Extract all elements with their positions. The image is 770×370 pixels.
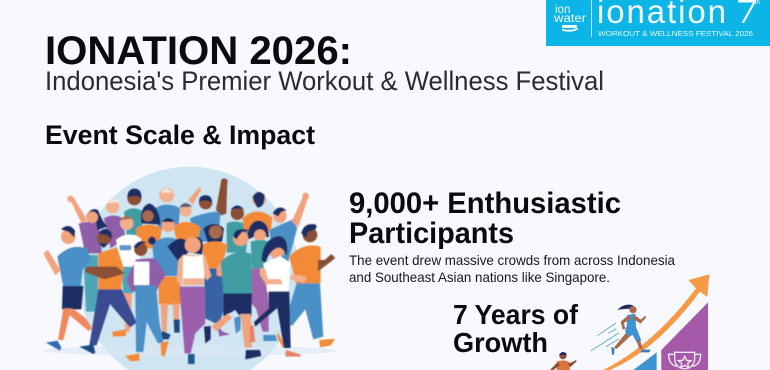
stat description: The event drew massive crowds from across Indonesia — [349, 252, 675, 268]
title: IONATION 2026: — [45, 29, 352, 73]
festival tagline: WORKOUT & WELLNESS FESTIVAL 2026 — [598, 29, 753, 38]
front row people — [43, 226, 307, 364]
running woman — [611, 305, 651, 355]
stat heading: 9,000+ Enthusiastic — [349, 187, 621, 220]
logo banner — [546, 0, 770, 46]
blue bar — [633, 352, 657, 370]
speed lines — [591, 323, 619, 351]
stat heading — [349, 187, 621, 250]
growth illustration — [550, 274, 709, 370]
backdrop circle — [79, 167, 300, 370]
subtitle: Indonesia's Premier Workout & Wellness Festival — [45, 66, 604, 96]
trophy icon — [669, 352, 701, 369]
second runner — [550, 352, 577, 370]
ground shadow — [43, 345, 337, 356]
stat description: and Southeast Asian nations like Singapore. — [349, 269, 610, 285]
growth arrow — [603, 274, 709, 370]
ion water logo: water — [553, 13, 586, 25]
back row people — [104, 178, 272, 253]
ion water logo — [553, 4, 586, 32]
growth heading: 7 Years of — [453, 299, 579, 330]
purple bar — [661, 302, 708, 370]
edition number: th — [755, 0, 760, 6]
crowd illustration — [43, 167, 337, 370]
section heading: Event Scale & Impact — [45, 120, 315, 150]
edition number — [738, 0, 760, 23]
ion water logo: ion — [555, 4, 570, 16]
growth heading: Growth — [453, 327, 548, 358]
middle row people — [67, 193, 335, 348]
stat description — [349, 252, 675, 285]
growth heading — [453, 299, 579, 358]
stat heading: Participants — [349, 217, 514, 250]
